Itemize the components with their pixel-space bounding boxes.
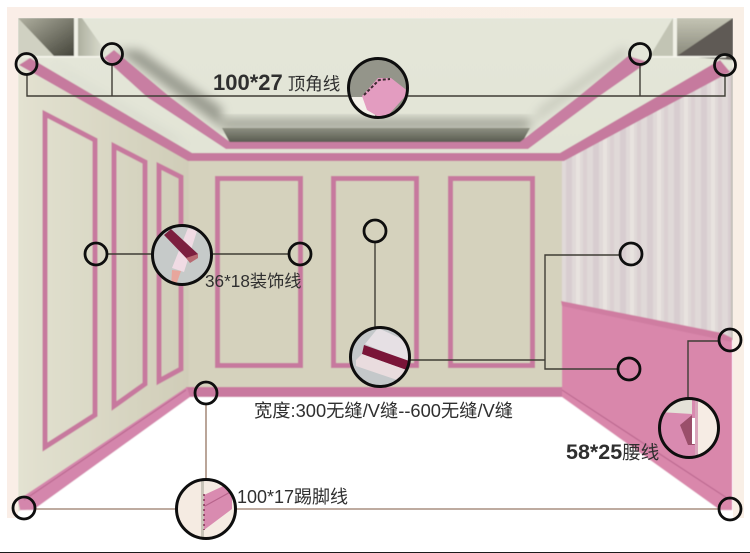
outer crown moulding (19, 58, 730, 161)
magnifier: decorative line profile (152, 225, 212, 288)
ceiling cutaway right (677, 18, 733, 56)
left wall (18, 66, 189, 512)
magnifier: waist line profile (655, 398, 719, 460)
bottom rule (0, 552, 750, 553)
label: waist line: 58*25腰线 (566, 440, 659, 464)
back wall (188, 158, 563, 390)
decorative line leaders (108, 253, 288, 255)
back wall panels (218, 178, 532, 366)
inner crown moulding (104, 50, 648, 149)
panel leaders (375, 243, 619, 369)
floor leader lines (36, 405, 718, 509)
label: skirting line: 100*17踢脚线 (237, 487, 348, 507)
ceiling cutaway left (18, 18, 74, 56)
ceiling (18, 18, 733, 163)
soft shadows on ceiling (116, 50, 222, 128)
ceiling leader lines (27, 65, 725, 96)
floor (18, 396, 728, 516)
label: width options: 宽度:300无缝/V缝--600无缝/V缝 (254, 400, 513, 421)
waist line leader (688, 341, 718, 398)
label: decorative line: 36*18装饰线 (205, 271, 302, 291)
leader lines (27, 65, 725, 398)
right wall striped (562, 68, 733, 340)
magnifier: crown moulding profile (347, 57, 409, 119)
left wall panels (45, 114, 181, 447)
wainscot panel on right wall (562, 302, 732, 510)
magnifier: wall panel sample (350, 327, 415, 387)
back baseboard (186, 387, 563, 397)
left baseboard (18, 387, 190, 510)
magnifier: skirting profile (176, 479, 236, 539)
recessed tray shadow (222, 128, 530, 143)
label: crown moulding: 100*27 顶角线 (213, 70, 340, 95)
